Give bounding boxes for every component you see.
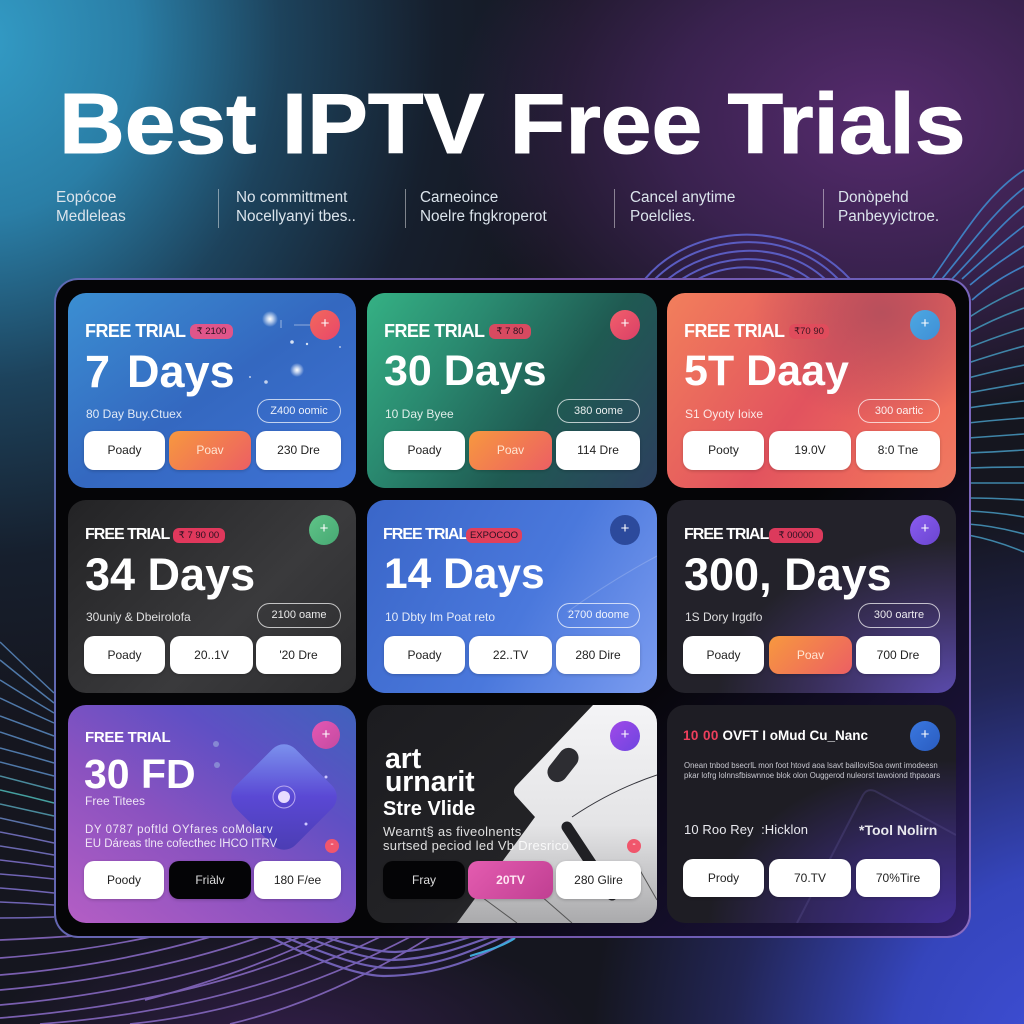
days: 30 FD [84, 751, 196, 797]
subtext: Free Titees [85, 794, 145, 808]
button [384, 636, 465, 674]
small red dot [627, 839, 641, 853]
price tag: ₹ 7 80 [496, 326, 524, 337]
price tag [489, 324, 531, 339]
small red dot: - [330, 839, 334, 850]
subtext: 80 Day Buy.Ctuex [86, 407, 182, 421]
feature note: *Tool Nolirn [859, 822, 937, 838]
pill: 380 oome [574, 405, 623, 417]
plus icon: + [921, 315, 929, 332]
card: 300 days violet [667, 500, 956, 693]
button: Poady [107, 443, 142, 457]
plus icon: + [921, 520, 929, 537]
button: 180 F/ee [274, 873, 321, 887]
title: Best IPTV Free Trials [59, 77, 966, 172]
pill: Z400 oomic [270, 405, 328, 417]
button [683, 859, 764, 897]
plus icon: + [621, 726, 629, 743]
button [856, 859, 940, 897]
button: 230 Dre [277, 443, 320, 457]
pill [257, 603, 341, 628]
wave: right fan [968, 288, 1024, 552]
price tag: ₹ 2100 [197, 326, 226, 337]
description: Wearnt§ as fiveolnents surtsed peciod led Vb Dresrico [383, 824, 569, 853]
days: 7 Days [85, 346, 235, 397]
button: 19.0V [794, 443, 826, 457]
button: 22..TV [493, 648, 528, 662]
button: Friàlv [195, 873, 225, 887]
device illustration [457, 705, 657, 923]
card: 30 FD purple [68, 705, 356, 923]
headline: 10 00 OVFT I oMud Cu_Nanc [683, 728, 868, 743]
button [769, 636, 852, 674]
button: 280 Dire [575, 648, 621, 662]
button [256, 431, 341, 470]
button [556, 636, 640, 674]
button [468, 861, 553, 899]
button [469, 636, 552, 674]
button: 114 Dre [577, 443, 619, 457]
plus icon [910, 721, 940, 751]
feature 4: Cancel anytime Poelclies. [630, 189, 735, 225]
days: 5T Daay [684, 347, 849, 395]
button: 20TV [496, 873, 525, 887]
button [383, 861, 465, 899]
streaks [566, 556, 657, 612]
label: FREE TRIAL [383, 526, 467, 543]
card: offer details [667, 705, 956, 923]
button [84, 861, 164, 899]
device outline [796, 789, 956, 923]
plus icon [910, 310, 940, 340]
button: Poady [107, 648, 142, 662]
label: FREE TRIAL [85, 321, 186, 341]
plus icon [610, 515, 640, 545]
button: Poav [196, 443, 224, 457]
wave: bottom-left fan [0, 934, 430, 1024]
plus icon [910, 515, 940, 545]
button: Poav [797, 648, 824, 662]
price tag: ₹ 00000 [778, 530, 814, 541]
pill [858, 399, 940, 423]
button: 8:0 Tne [878, 443, 918, 457]
subtext: 1S Dory Irgdfo [685, 610, 762, 624]
feature 1: Eopócoe Medleleas [56, 189, 126, 225]
button [256, 636, 341, 674]
card: 7 days [68, 293, 356, 488]
subtext: S1 Oyoty Ioixe [685, 407, 763, 421]
plus icon: + [321, 315, 329, 332]
headline: art urnarit [385, 743, 475, 798]
pill: 2700 doome [568, 609, 629, 621]
plus icon: + [320, 520, 328, 537]
label: FREE TRIAL [384, 321, 484, 341]
price tag: EXPOCOO [470, 530, 518, 541]
price tag: ₹ 7 90 00 [179, 530, 219, 541]
button [170, 636, 253, 674]
price tag [789, 324, 829, 339]
button [769, 859, 851, 897]
button: 70.TV [794, 871, 826, 885]
price tag: ₹70 90 [794, 326, 824, 337]
button [683, 636, 764, 674]
card: 5T day coral [667, 293, 956, 488]
button [169, 431, 251, 470]
price tag [769, 528, 823, 543]
plus icon [610, 721, 640, 751]
plus icon [610, 310, 640, 340]
button: '20 Dre [279, 648, 318, 662]
main panel [54, 278, 971, 938]
button [169, 861, 251, 899]
button [769, 431, 851, 470]
card: art promo [367, 705, 657, 923]
days: 300, Days [684, 549, 892, 600]
feature 3: Carneoince Noelre fngkroperot [420, 189, 547, 225]
button: Prody [708, 871, 739, 885]
button [384, 431, 465, 470]
label: FREE TRIAL [684, 526, 768, 543]
days: 14 Days [384, 551, 545, 598]
wave: center hump [645, 235, 850, 279]
label: FREE TRIAL [684, 321, 784, 341]
plus icon [312, 721, 340, 749]
wave: bottom arcs [270, 937, 515, 976]
wave: top-right rising lines [932, 170, 1024, 300]
button [556, 861, 641, 899]
label: FREE TRIAL [85, 729, 170, 746]
plus icon: + [621, 315, 629, 332]
card: 34 days dark [68, 500, 356, 693]
feature strip [56, 189, 939, 228]
button [254, 861, 341, 899]
wave: left fan [0, 642, 54, 918]
description: Onean tnbod bsecrlL mon foot htovd aoa lsavt bailloviSoa ownt imodeesn pkar lofrg lolnnsfbiswnnoe blok olon Ouggerod nuleorst tawoiond thpaoars [684, 761, 940, 780]
button [856, 431, 940, 470]
button [84, 431, 165, 470]
label: FREE TRIAL [85, 526, 169, 543]
plus icon: + [921, 726, 929, 743]
price tag [466, 528, 522, 543]
pill: 300 oartre [874, 609, 924, 621]
button: Fray [412, 873, 436, 887]
subtext: 10 Day Byee [385, 407, 454, 421]
button: Poady [706, 648, 741, 662]
device illustration [231, 744, 337, 850]
button: 70%Tire [876, 871, 920, 885]
card: 14 days blue [367, 500, 657, 693]
button: 700 Dre [877, 648, 919, 662]
button [84, 636, 165, 674]
button: Poady [407, 648, 442, 662]
pill [557, 399, 640, 423]
button: Poody [107, 873, 141, 887]
description: DY 0787 poftld OYfares coMolarv EU Dáreas tlne cofecthec IHCO ITRV [85, 824, 277, 850]
sparkles [249, 312, 341, 384]
pill: 300 oartic [875, 405, 923, 417]
button: 280 Glire [574, 873, 623, 887]
card: 30 days green [367, 293, 657, 488]
button: Pooty [708, 443, 739, 457]
subtext: 30uniy & Dbeirolofa [86, 610, 191, 624]
button [856, 636, 940, 674]
price tag [190, 324, 233, 339]
pill: 2100 oame [271, 609, 327, 621]
small red dot [325, 839, 339, 853]
price tag [173, 528, 225, 543]
subhead: Stre Vlide [383, 798, 475, 820]
small red dot: - [632, 839, 636, 850]
button [469, 431, 552, 470]
days: 34 Days [85, 549, 255, 600]
plus icon: + [621, 520, 629, 537]
button [683, 431, 764, 470]
plus icon: + [322, 726, 330, 743]
plus icon [309, 515, 339, 545]
subtext: 10 Dbty Im Poat reto [385, 610, 495, 624]
button [556, 431, 640, 470]
feature 2: No committment Nocellyanyi tbes.. [236, 189, 356, 225]
button: Poady [407, 443, 442, 457]
pill [557, 603, 640, 628]
feature note: 10 Roo Rey :Hicklon [684, 822, 808, 837]
plus icon [310, 310, 340, 340]
feature 5: Donòpehd Panbeyyictroe. [838, 189, 939, 225]
dots [213, 741, 220, 768]
button: 20..1V [194, 648, 229, 662]
pill [858, 603, 940, 628]
pill [257, 399, 341, 423]
days: 30 Days [384, 347, 547, 395]
button: Poav [497, 443, 524, 457]
